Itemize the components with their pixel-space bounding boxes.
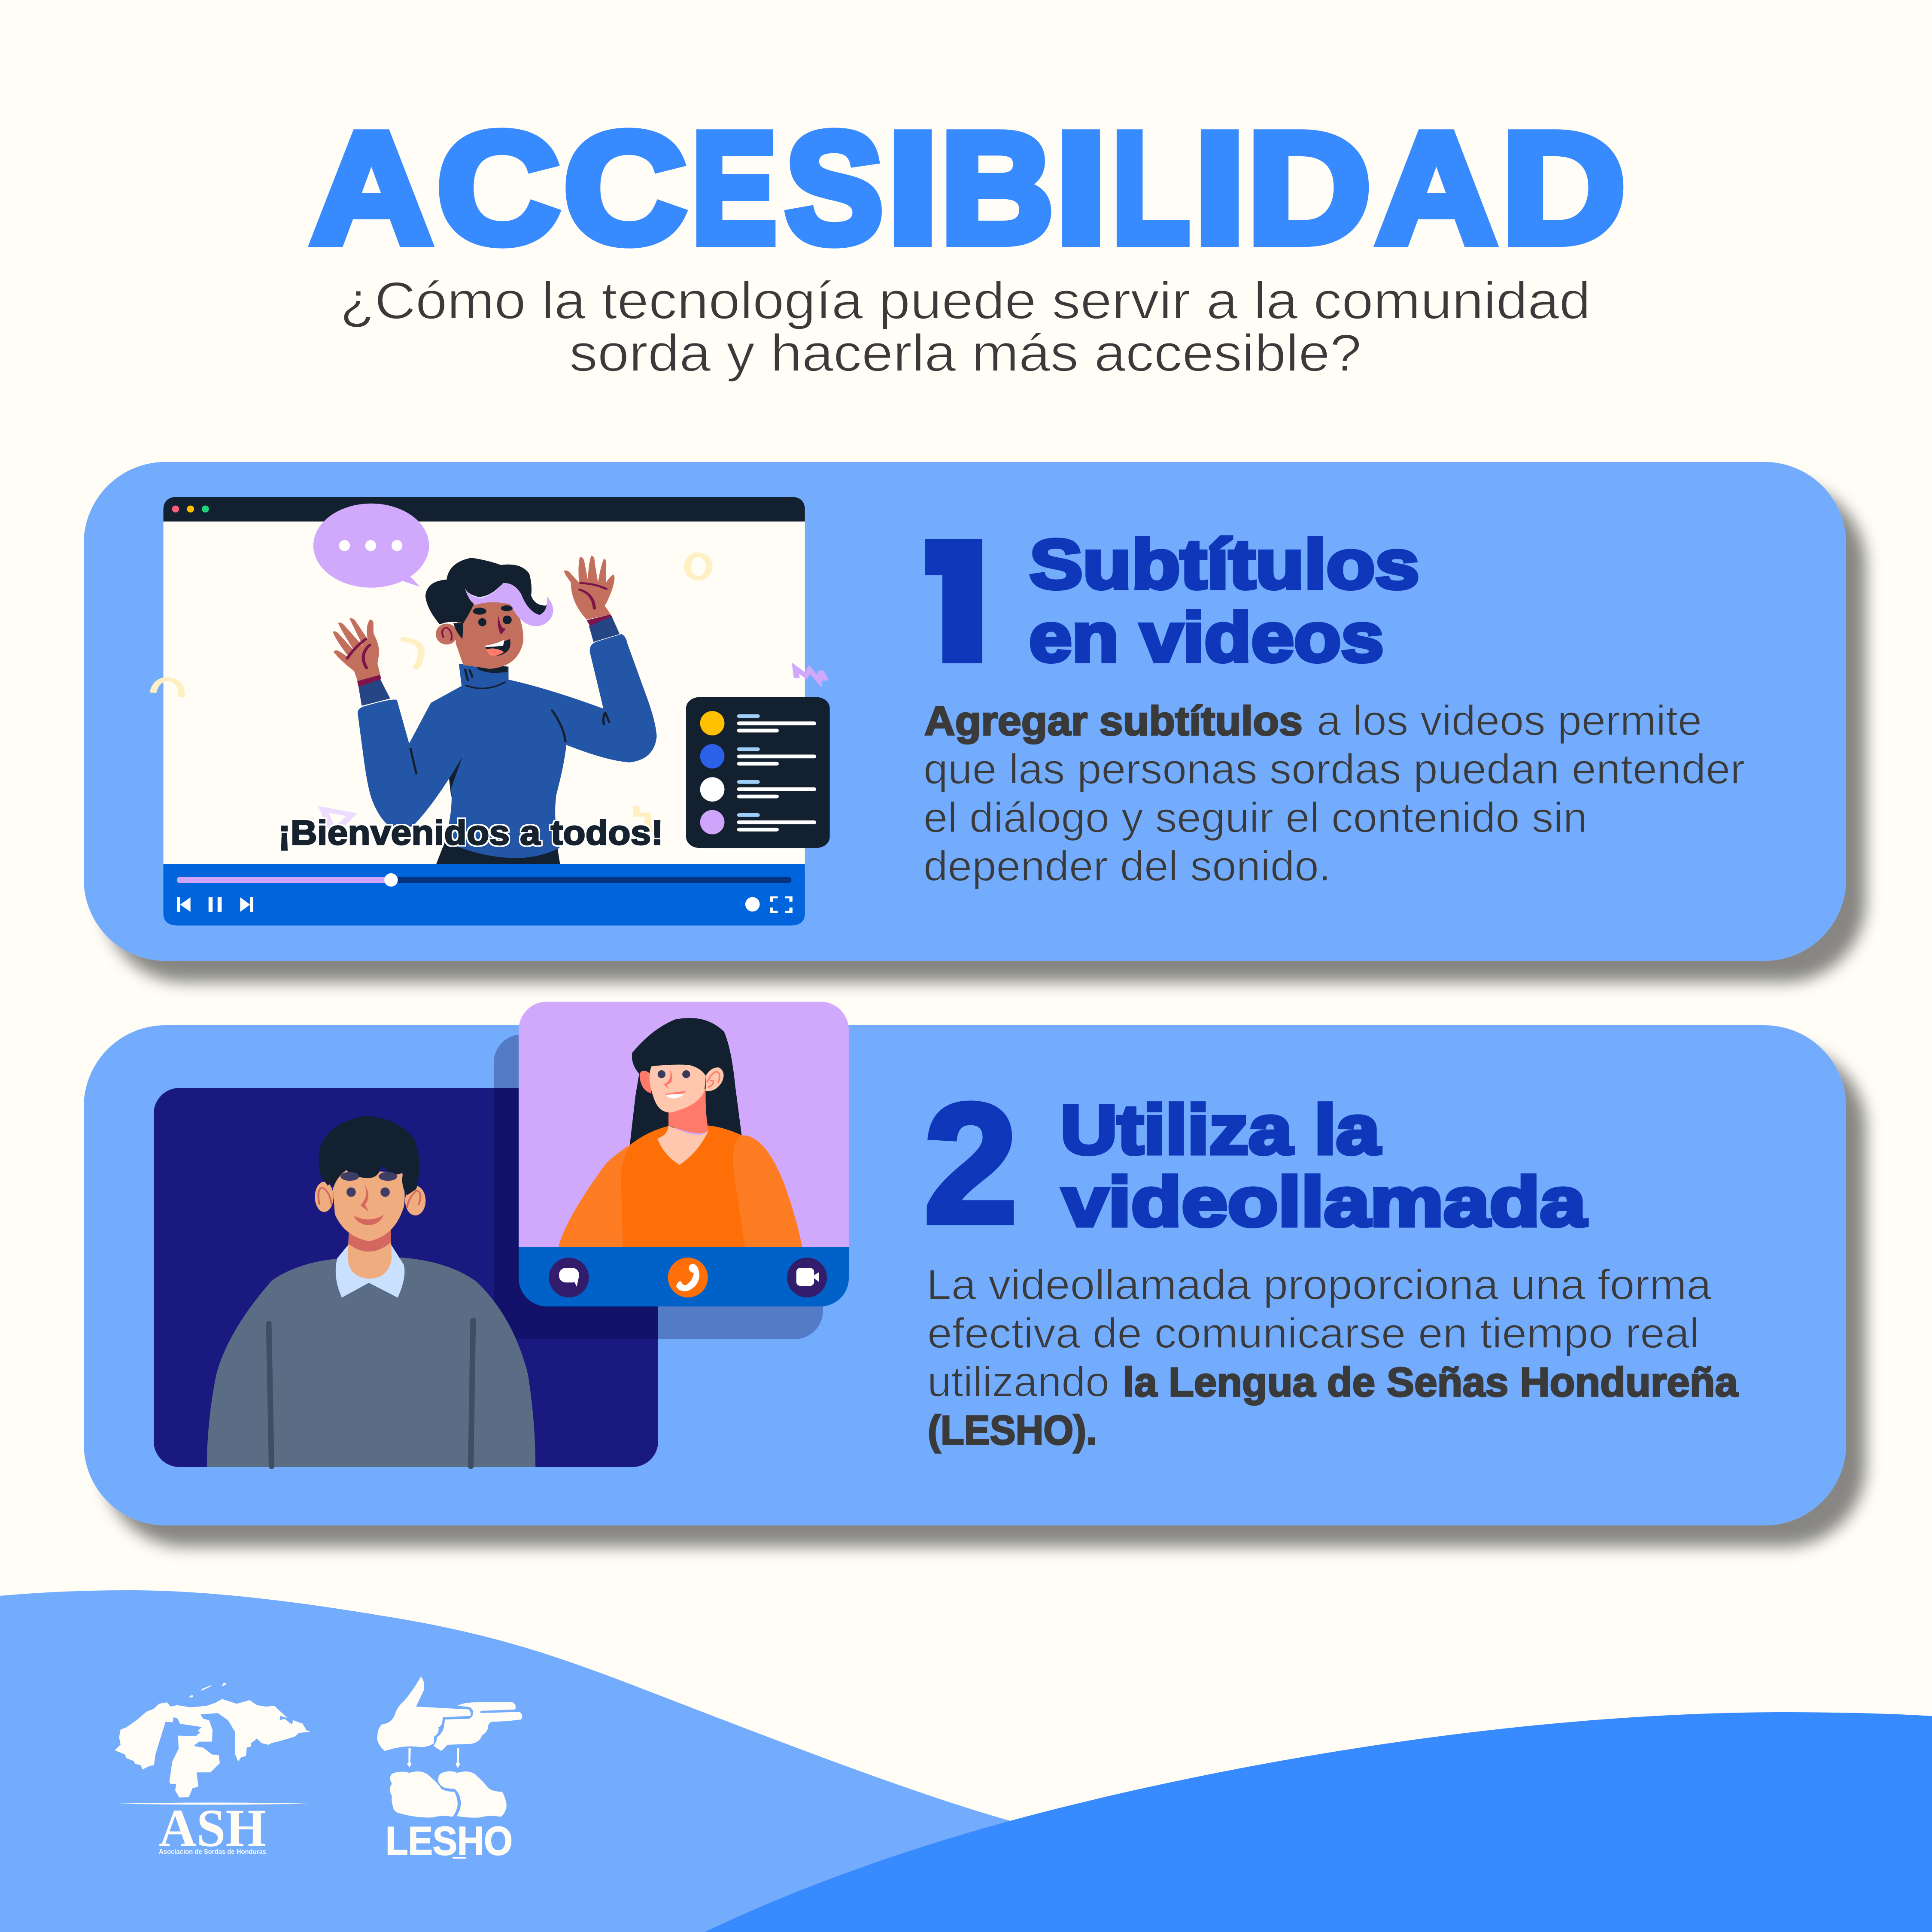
body text 2: la Lengua de Señas Hondureña	[1123, 1359, 1738, 1405]
title: B	[941, 100, 1054, 276]
body text 1: a los videos permite	[1317, 697, 1702, 744]
title: I	[1194, 100, 1245, 276]
panel: subtítulos en videos	[84, 462, 1846, 961]
title: I	[887, 100, 939, 276]
woman	[558, 1018, 802, 1248]
heading 1: en videos	[1029, 598, 1384, 676]
ASH tagline: Asociacion de Sordas de Honduras	[159, 1848, 266, 1856]
navy card	[154, 1088, 658, 1467]
call bar	[519, 1247, 849, 1306]
title: D	[1247, 100, 1371, 276]
body text 1: Agregar subtítulos	[924, 698, 1303, 744]
title: L	[1112, 100, 1190, 276]
body text 1: depender del sonido.	[923, 842, 1331, 890]
LESHO underline mark	[453, 1857, 466, 1859]
title: D	[1502, 100, 1625, 276]
logo: LESHO	[377, 1677, 522, 1863]
body text 1: el diálogo y seguir el contenido sin	[923, 794, 1587, 841]
title bar	[164, 497, 805, 522]
window dots	[172, 505, 209, 513]
caption: ¡Bienvenidos a todos!	[278, 814, 663, 852]
subtitle: ¿Cómo la tecnología puede servir a la comunidad	[340, 271, 1591, 330]
title: A	[1376, 100, 1496, 276]
number 1: 1	[910, 504, 1008, 701]
person raising hands	[333, 556, 657, 864]
body text 2: (LESHO).	[928, 1407, 1097, 1453]
title: C	[564, 100, 686, 276]
Honduras map	[115, 1683, 311, 1798]
number 1	[925, 539, 982, 663]
control bar	[164, 864, 805, 926]
speech bubble	[313, 504, 429, 588]
ASH wordmark: ASH	[159, 1799, 266, 1858]
title: I	[1055, 100, 1107, 276]
heading 1: Subtítulos	[1030, 526, 1419, 603]
logo: ASH	[115, 1683, 311, 1858]
body text 2: efectiva de comunicarse en tiempo real	[927, 1309, 1699, 1357]
heading 2	[1060, 1091, 1587, 1241]
divider line	[116, 1802, 309, 1805]
title: E	[692, 100, 777, 276]
video window background	[164, 510, 805, 875]
body text 2: La videollamada proporciona una forma	[927, 1261, 1712, 1308]
subtitle: sorda y hacerla más accesible?	[569, 324, 1361, 382]
video call illustration	[154, 1002, 849, 1467]
panel: videollamada	[84, 1002, 1846, 1525]
body text 1	[923, 697, 1745, 890]
video player illustration	[153, 497, 830, 926]
number 2: 2	[924, 1069, 1018, 1258]
title: C	[437, 100, 559, 276]
heading 2: Utiliza la	[1060, 1091, 1381, 1169]
body text 2	[927, 1261, 1738, 1453]
woman call card	[519, 1002, 849, 1306]
title: S	[785, 100, 883, 276]
heading 2: videollamada	[1062, 1163, 1587, 1241]
translucent back card	[494, 1034, 823, 1339]
dark blue wave	[705, 1712, 1932, 1932]
LESHO wordmark: LESHO	[386, 1818, 513, 1863]
heading 1	[1029, 526, 1419, 676]
call icons	[549, 1258, 827, 1297]
decorative shapes	[153, 555, 826, 832]
body text 1: que las personas sordas puedan entender	[923, 745, 1745, 793]
subtitle	[340, 271, 1591, 382]
signing hands	[377, 1677, 522, 1818]
light blue wave	[0, 1590, 1010, 1932]
body text 2: utilizando	[927, 1358, 1109, 1405]
title: A	[311, 100, 432, 276]
man	[207, 1115, 535, 1467]
chat side panel	[686, 697, 830, 848]
